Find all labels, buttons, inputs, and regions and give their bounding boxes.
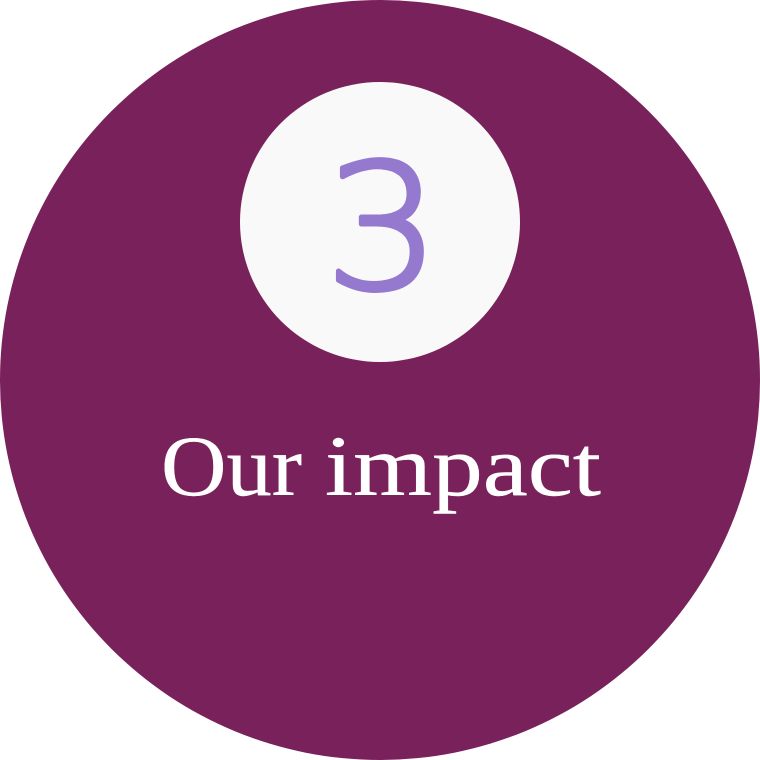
heading: Our impact: impact	[325, 418, 601, 514]
heading: Our impact	[161, 418, 601, 514]
inner white circle	[240, 82, 520, 362]
heading: Our impact: Our	[161, 418, 302, 514]
number 3: 3	[325, 127, 440, 329]
